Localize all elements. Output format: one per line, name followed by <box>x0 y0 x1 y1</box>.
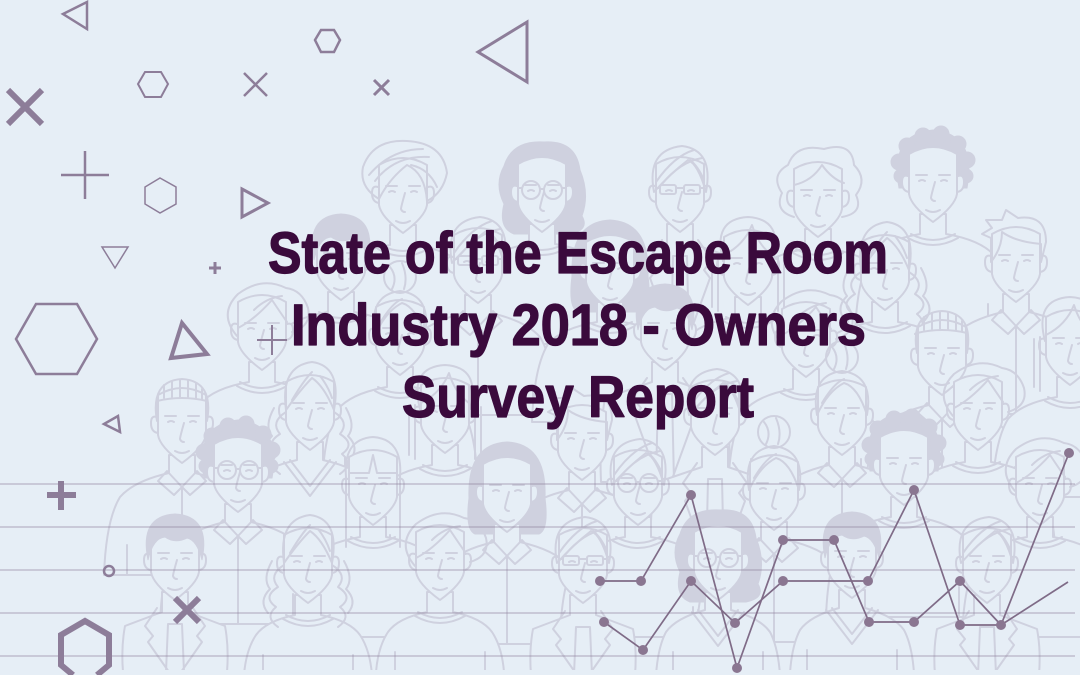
person: long hair woman <box>670 217 826 417</box>
person: bun woman lower <box>696 416 852 642</box>
title: Survey Report <box>402 365 754 430</box>
person: hat woman far right <box>962 438 1080 637</box>
icon: hexagon left <box>138 72 168 97</box>
icon: bold cross <box>8 90 42 124</box>
icon: triangle right <box>242 189 268 217</box>
person: striped hair man front <box>934 517 1040 675</box>
person: back row dark hair glasses <box>464 142 620 344</box>
person: bun woman right <box>764 341 920 567</box>
person: ribbed hair man right <box>864 311 1020 507</box>
person: side hair front <box>376 513 504 672</box>
icon: plus over crowd <box>257 325 287 355</box>
icon: down triangle <box>102 247 128 268</box>
person: back row curly outline <box>740 147 896 349</box>
icon: small plus <box>209 262 221 274</box>
person: glasses man front <box>530 517 636 675</box>
person: curly filled lower <box>826 409 982 617</box>
person: ribbed hair man left <box>104 379 260 575</box>
title <box>268 221 888 430</box>
person: man filled hair behind title <box>263 214 419 412</box>
person: wavy woman front <box>244 515 372 675</box>
person: woman left behind plus <box>184 283 340 482</box>
person: back row glasses man <box>616 146 744 344</box>
person: filled hair man front <box>790 512 914 673</box>
person: curly glasses man <box>160 416 316 624</box>
title: Industry 2018 - Owners <box>291 293 866 358</box>
icon: large hexagon <box>16 304 97 374</box>
person: round glasses man <box>560 439 716 637</box>
person: suit man filled hair <box>122 514 228 672</box>
icon: bold cross lower <box>175 598 199 622</box>
icon: pointy hexagon <box>145 178 176 213</box>
series two <box>599 485 1068 655</box>
person: wavy woman left <box>232 362 388 562</box>
person: wavy woman right <box>807 222 963 422</box>
icon: triangle top left <box>63 2 87 29</box>
person: woman side hair right <box>900 363 1056 562</box>
decorative geometric shapes <box>8 2 527 675</box>
person: man with collar under report <box>504 388 660 592</box>
line chart <box>595 448 1074 673</box>
person: long hair woman centre <box>367 365 523 565</box>
icon: thick triangle <box>171 323 207 358</box>
icon: cross small <box>374 80 389 95</box>
title: State of the Escape Room <box>268 221 888 286</box>
icon: bold plus <box>47 481 76 510</box>
person: suit man centre right <box>650 369 780 567</box>
person: straight bangs woman <box>295 437 451 637</box>
icon: thick hexagon <box>61 621 109 675</box>
bottom edge mask <box>0 670 1080 675</box>
person: dark hair behind title <box>532 220 688 422</box>
crowd illustration <box>104 126 1080 675</box>
icon: hexagon top <box>315 30 340 52</box>
icon: small circle <box>104 566 114 576</box>
icon: tiny triangle <box>104 416 120 432</box>
icon: large triangle <box>478 22 527 82</box>
icon: thin plus <box>61 151 109 199</box>
series one <box>595 448 1074 673</box>
chart grid lines <box>0 484 1075 656</box>
person: filled hair glasses woman front <box>656 510 780 675</box>
person: spiky hair man <box>938 210 1080 414</box>
person: long hair far right <box>992 297 1080 497</box>
person: back row wavy bob <box>325 141 481 345</box>
person: glasses man behind title <box>400 217 556 415</box>
person: filled bob woman <box>429 442 585 644</box>
person: side hair man <box>728 290 884 489</box>
icon: cross medium <box>244 73 267 96</box>
person: back row curly filled <box>855 126 1011 334</box>
person: bun woman centre <box>322 261 478 487</box>
person: filled hair man centre <box>600 284 730 482</box>
